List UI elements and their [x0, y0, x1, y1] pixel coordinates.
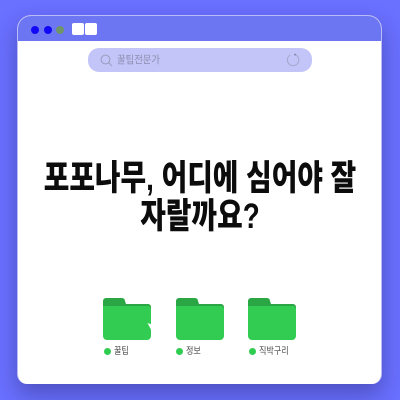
icon: folder [248, 298, 296, 340]
label: 직박구리 [259, 346, 289, 357]
label [176, 346, 201, 357]
title [44, 159, 356, 236]
title: 포포나무, 어디에 심어야 잘 [44, 159, 356, 198]
label [104, 346, 129, 357]
window header bar [18, 16, 382, 41]
folder item: 꿀팁 [103, 298, 151, 357]
icon: reload [286, 54, 300, 66]
folder item: 정보 [176, 298, 224, 357]
search bar [88, 48, 312, 72]
title: 자랄까요? [140, 197, 260, 236]
icon: folder [103, 298, 151, 340]
icon: magnifier [100, 54, 112, 66]
window control dots [31, 26, 64, 34]
icon: folder [176, 298, 224, 340]
window tab squares [72, 23, 97, 35]
search text: 꿀팁전문가 [117, 54, 160, 66]
folder item: 직박구리 [248, 298, 296, 357]
label: 꿀팁 [114, 346, 129, 357]
label: 정보 [186, 346, 201, 357]
